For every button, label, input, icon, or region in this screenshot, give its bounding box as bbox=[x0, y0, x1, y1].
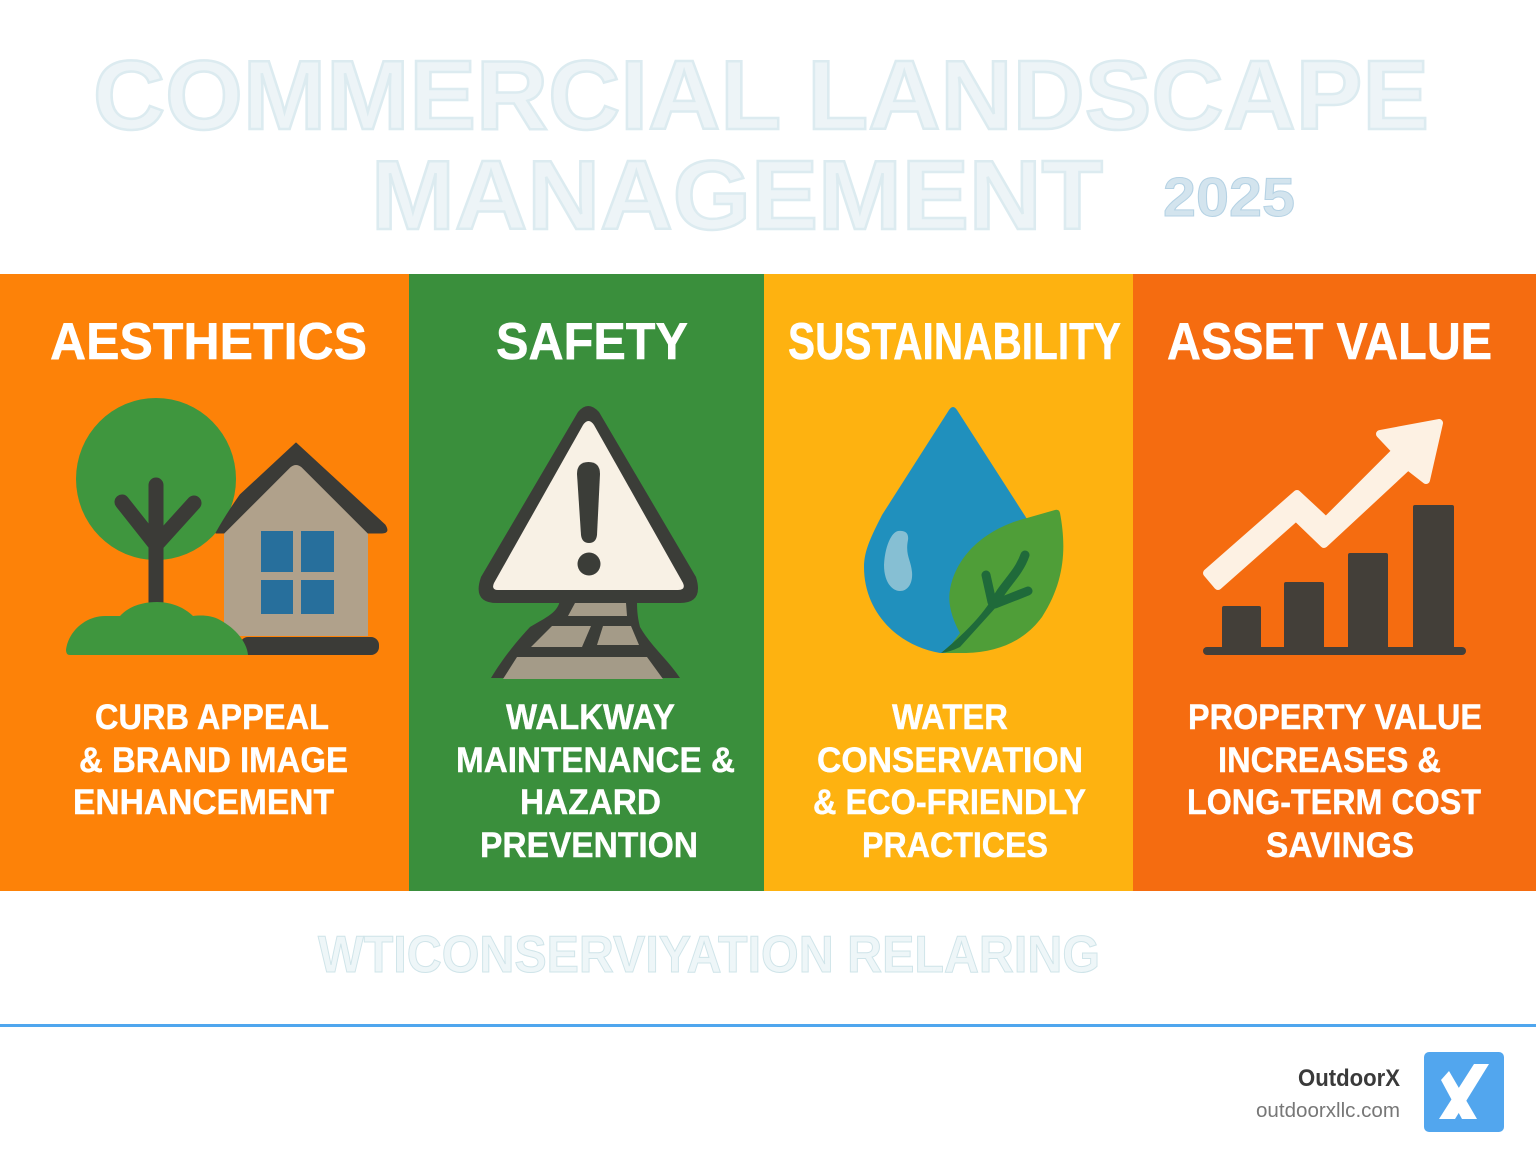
title bbox=[93, 40, 1429, 250]
faded caption: WTICONSERVIYATION RELARING bbox=[318, 926, 1100, 984]
icon: warning triangle over walkway bbox=[479, 406, 698, 679]
safety description: HAZARD bbox=[520, 783, 661, 822]
icon: rising arrow over bar chart bbox=[1203, 423, 1466, 655]
safety description: WALKWAY bbox=[506, 698, 675, 737]
icon: water drop and leaf bbox=[864, 407, 1063, 653]
safety background bbox=[409, 274, 764, 891]
asset value description: SAVINGS bbox=[1266, 826, 1414, 865]
year label: 2025 bbox=[1163, 166, 1295, 228]
safety description: PREVENTION bbox=[480, 826, 698, 865]
safety heading: SAFETY bbox=[496, 313, 688, 371]
sustainability description: PRACTICES bbox=[862, 826, 1048, 865]
asset value description: PROPERTY VALUE bbox=[1188, 698, 1482, 737]
sustainability description bbox=[813, 698, 1086, 865]
brand name: OutdoorX bbox=[1298, 1065, 1400, 1092]
aesthetics description: CURB APPEAL bbox=[95, 698, 329, 737]
asset value description bbox=[1187, 698, 1482, 865]
sustainability heading: SUSTAINABILITY bbox=[788, 313, 1121, 371]
icon: tree and house bbox=[66, 398, 387, 655]
panel: safety bbox=[409, 274, 764, 891]
sustainability background bbox=[764, 274, 1133, 891]
brand url: outdoorxllc.com bbox=[1256, 1100, 1400, 1122]
asset value heading: ASSET VALUE bbox=[1167, 313, 1492, 371]
title: COMMERCIAL LANDSCAPE bbox=[93, 40, 1429, 150]
sustainability description: WATER bbox=[892, 698, 1008, 737]
aesthetics description: & BRAND IMAGE bbox=[79, 741, 348, 780]
panel: asset value bbox=[1133, 274, 1536, 891]
asset value description: LONG-TERM COST bbox=[1187, 783, 1481, 822]
asset value background bbox=[1133, 274, 1536, 891]
aesthetics heading: AESTHETICS bbox=[50, 313, 367, 371]
aesthetics background bbox=[0, 274, 410, 891]
aesthetics description bbox=[73, 698, 348, 822]
safety description bbox=[456, 698, 735, 865]
panel: aesthetics bbox=[0, 274, 410, 891]
title: MANAGEMENT bbox=[371, 140, 1103, 250]
sustainability description: CONSERVATION bbox=[817, 741, 1083, 780]
footer brand bbox=[1256, 1052, 1504, 1132]
asset value description: INCREASES & bbox=[1218, 741, 1441, 780]
aesthetics description: ENHANCEMENT bbox=[73, 783, 334, 822]
safety description: MAINTENANCE & bbox=[456, 741, 735, 780]
sustainability description: & ECO-FRIENDLY bbox=[813, 783, 1086, 822]
panel: sustainability bbox=[764, 274, 1133, 891]
icon: logo bbox=[1424, 1052, 1504, 1132]
